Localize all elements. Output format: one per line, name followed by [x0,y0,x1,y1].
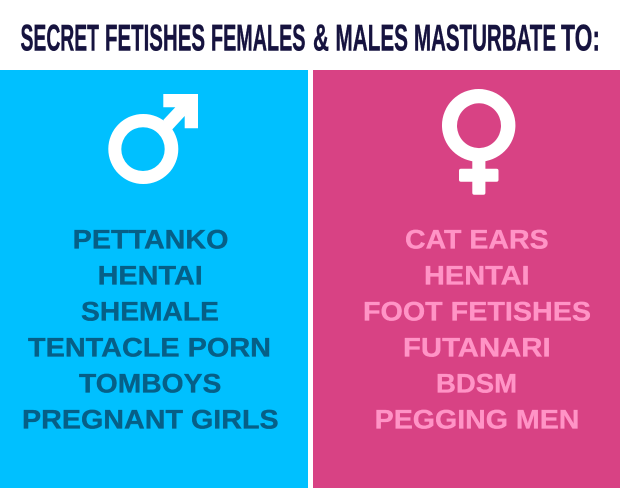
item: Hentai: HENTAI [98,260,203,290]
title: FEMALES [211,18,306,58]
item: Shemale: SHEMALE [81,296,219,326]
panel: male [0,70,308,488]
title: & [313,18,329,58]
title: MALES [336,18,408,58]
female list [363,224,591,434]
title: FETISHES [105,18,205,58]
male list [22,224,279,434]
title: SECRET [20,18,99,58]
item: Futanari: FUTANARI [403,332,551,362]
item: Tomboys: TOMBOYS [79,368,221,398]
panel: female [313,70,620,488]
item: Foot fetishes: FOOT FETISHES [363,296,591,326]
icon: male symbol [108,94,198,184]
panel background: blue [0,70,308,488]
icon: female symbol [442,89,515,195]
item: Pregnant girls: PREGNANT GIRLS [22,404,279,434]
panel background: pink [313,70,620,488]
item: Tentacle porn: TENTACLE PORN [28,332,271,362]
title [20,18,600,58]
item: Hentai: HENTAI [424,260,530,290]
item: Pettanko: PETTANKO [73,224,228,254]
item: Pegging men: PEGGING MEN [375,404,579,434]
item: Cat ears: CAT EARS [405,224,549,254]
item: BDSM: BDSM [436,368,517,398]
